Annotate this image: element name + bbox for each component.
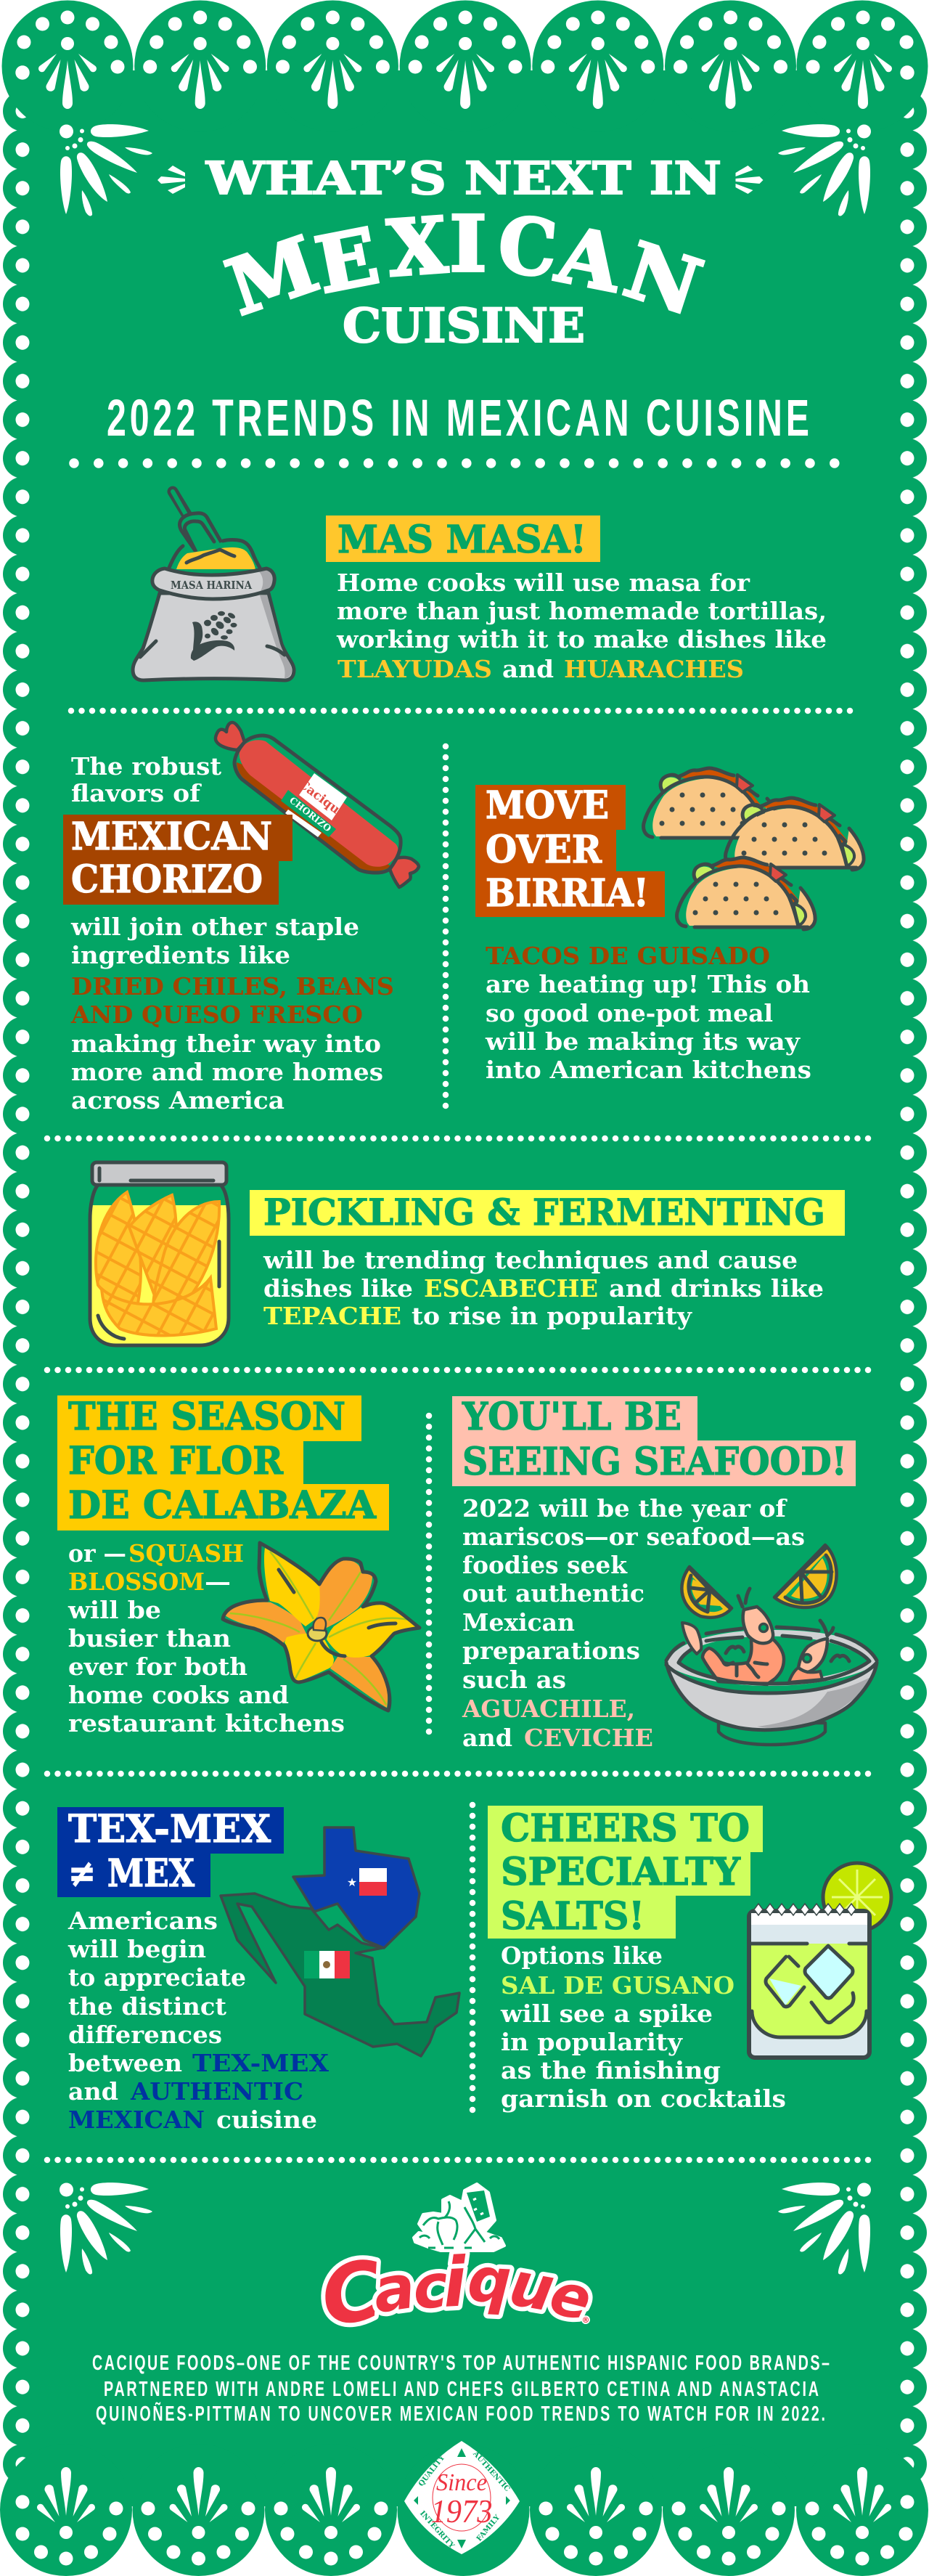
footer paragraph: QUINOÑES-PITTMAN TO UNCOVER MEXICAN FOOD TRENDS TO WATCH FOR IN 2022. (96, 2402, 825, 2426)
logo wordmark: c (409, 2251, 451, 2323)
divider 2 (47, 1136, 874, 1141)
chorizo label (281, 773, 349, 837)
badge: since 1973 (404, 2441, 520, 2554)
title arched word: N (615, 225, 711, 333)
chorizo label: CHORIZO (287, 794, 334, 834)
body text: BLOSSOM (68, 1568, 205, 1596)
badge: since 1973: FAMILY (475, 2514, 502, 2543)
map of texas: ★ (347, 1875, 357, 1889)
body text: more and more homes (71, 1058, 383, 1086)
body text: into American kitchens (486, 1056, 811, 1084)
panel: flor de calabaza (57, 1395, 420, 1737)
divider 1 (71, 708, 851, 714)
heading banner: FOR FLOR (68, 1439, 284, 1483)
body text: will begin (67, 1935, 206, 1963)
body text: and (502, 655, 554, 683)
body text (485, 942, 811, 1084)
body text: HUARACHES (564, 655, 744, 683)
citrus wedge left (682, 1567, 732, 1618)
heading banner: TEX-MEX (68, 1807, 271, 1851)
body text: out authentic (462, 1579, 644, 1607)
body text: — (205, 1568, 231, 1596)
body text: will join other staple (70, 913, 359, 941)
heading banner (57, 1395, 389, 1530)
body text (70, 913, 394, 1114)
body text: ingredients like (71, 941, 290, 969)
sack body (133, 593, 294, 680)
heading banner (452, 1395, 856, 1486)
body text: foodies seek (462, 1551, 628, 1579)
title arched word (216, 200, 711, 333)
corner flower top right (778, 124, 871, 216)
heading banner (63, 815, 292, 905)
body text: and (462, 1724, 512, 1752)
heading banner: SALTS! (501, 1894, 644, 1939)
icon: chorizo sausage (216, 722, 419, 887)
icon: squash blossom (223, 1543, 420, 1711)
body text: Americans (67, 1907, 218, 1935)
shrimp (682, 1589, 849, 1684)
body text: between (68, 2049, 182, 2077)
logo wordmark: ® (582, 2315, 589, 2325)
intro text: flavors of (71, 779, 202, 807)
body text: and (68, 2077, 118, 2106)
body text: making their way into (71, 1030, 381, 1058)
vertical divider (470, 1805, 475, 2120)
divider 5 (47, 2157, 874, 2163)
title arched word: X (385, 200, 450, 294)
body text: will be trending techniques and cause (263, 1246, 798, 1274)
body text: AGUACHILE, (462, 1695, 635, 1723)
icon: maps of mexico and texas (221, 1827, 459, 2056)
badge: since 1973: AUTHENTIC (471, 2450, 511, 2493)
vertical divider (443, 746, 449, 1109)
heading banner: SEEING SEAFOOD! (462, 1440, 847, 1484)
body text: SAL DE GUSANO (501, 1971, 734, 2000)
heading banner: SPECIALTY (501, 1850, 741, 1894)
body text: are heating up! This oh (486, 970, 810, 998)
heading banner: MOVE (486, 783, 609, 828)
body text: in popularity (501, 2028, 683, 2056)
body text: as the finishing (501, 2056, 721, 2084)
body text: home cooks and (68, 1681, 289, 1709)
icon: pickle jar (90, 1162, 229, 1345)
body text: mariscos—or seafood—as (462, 1523, 805, 1551)
intro text: The robust (71, 752, 222, 780)
body text: and drinks like (609, 1274, 824, 1303)
bottom border cut-outs (16, 2467, 914, 2566)
intro text (71, 752, 222, 807)
icon: tacos (644, 768, 864, 929)
body text: ever for both (68, 1652, 247, 1681)
heading banner: THE SEASON (68, 1395, 345, 1439)
heading banner: ≠ MEX (68, 1851, 195, 1896)
body text: or — (68, 1539, 126, 1568)
body text: working with it to make dishes like (336, 625, 827, 653)
heading banner: BIRRIA! (486, 871, 649, 916)
sack neck (152, 568, 274, 599)
bowl back rim (666, 1630, 877, 1686)
badge: since 1973: 1973 (431, 2493, 492, 2530)
body text: preparations (462, 1637, 640, 1665)
logo wordmark: q (466, 2244, 513, 2318)
logo wordmark (316, 2243, 598, 2344)
badge: since 1973: Since (436, 2469, 487, 2496)
logo wordmark: i (441, 2243, 470, 2323)
body text: to rise in popularity (412, 1302, 692, 1330)
top border cut-outs (15, 10, 914, 109)
masa mound (169, 540, 260, 569)
icon: cocktail glass with lime (749, 1863, 891, 2058)
panel: move over birria (475, 768, 864, 1084)
body text: MEXICAN (68, 2106, 205, 2134)
body text: TLAYUDAS (337, 655, 492, 683)
badge: since 1973: QUALITY (417, 2453, 447, 2488)
corner flower top left (60, 124, 152, 216)
body text: Options like (501, 1941, 663, 1970)
body text: SQUASH (128, 1539, 244, 1568)
icon: masa harina sack (133, 492, 294, 680)
corner flower bottom right (778, 2182, 871, 2274)
icon: shrimp bowl with citrus (666, 1545, 877, 1745)
body text: 2022 will be the year of (462, 1494, 787, 1523)
body text: Home cooks will use masa for (337, 568, 750, 597)
body text (336, 568, 827, 683)
body text: such as (462, 1666, 566, 1694)
logo wordmark: e (544, 2259, 598, 2334)
body text: will be making its way (485, 1027, 801, 1056)
body text: DRIED CHILES, BEANS (71, 972, 394, 1000)
bowl foot (719, 1723, 825, 1745)
body text: cuisine (216, 2106, 317, 2134)
body text: CEVICHE (524, 1724, 653, 1752)
vertical divider (426, 1416, 432, 1733)
heading banner: CHORIZO (71, 857, 263, 902)
body text (500, 1941, 786, 2113)
body text (462, 1494, 805, 1752)
chorizo label: Cacique (295, 777, 349, 822)
heading banner: PICKLING & FERMENTING (263, 1191, 825, 1234)
heading banner: CHEERS TO (501, 1806, 750, 1851)
body text: TACOS DE GUISADO (486, 942, 770, 970)
logo wordmark: C (316, 2243, 388, 2344)
body text: differences (68, 2021, 222, 2049)
logo: cacique (316, 2184, 598, 2344)
panel: mas masa (133, 492, 827, 683)
body text: TEPACHE (263, 1302, 401, 1330)
divider 4 (47, 1771, 874, 1777)
map of texas (293, 1827, 420, 1948)
footer paragraph: CACIQUE FOODS–ONE OF THE COUNTRY'S TOP AUTHENTIC HISPANIC FOOD BRANDS– (92, 2352, 830, 2375)
body text: the distinct (68, 1992, 227, 2021)
panel: specialty salts (488, 1806, 891, 2113)
heading banner: DE CALABAZA (68, 1483, 377, 1528)
title line 3: CUISINE (343, 298, 585, 354)
body text: will be (67, 1596, 161, 1624)
heading banner (57, 1807, 284, 1897)
heading banner: OVER (486, 828, 602, 872)
heading banner (475, 783, 665, 917)
dotted rule under subtitle (74, 458, 835, 468)
body text: Mexican (462, 1608, 575, 1637)
body text: garnish on cocktails (501, 2084, 786, 2113)
title arched word: E (308, 211, 385, 311)
body text: will see a spike (500, 2000, 713, 2028)
heading banner: MAS MASA! (337, 518, 586, 562)
title block (157, 152, 764, 354)
corn icon (191, 611, 237, 661)
heading banner: MEXICAN (71, 815, 272, 859)
body text (263, 1246, 824, 1330)
citrus wedge right (774, 1545, 837, 1607)
heading banner: YOU'LL BE (462, 1395, 682, 1439)
body text: dishes like (263, 1274, 413, 1303)
body text (67, 1907, 329, 2134)
icon: masa harina sack: MASA HARINA (171, 579, 252, 592)
panel: tex-mex (57, 1807, 459, 2134)
map of mexico (221, 1894, 459, 2056)
flourish left (157, 166, 185, 194)
badge: since 1973: INTEGRITY (418, 2509, 456, 2551)
body text: to appreciate (68, 1963, 246, 1992)
title arched word: M (216, 219, 329, 333)
title arched word: C (495, 200, 560, 295)
body text: across America (71, 1086, 285, 1114)
body text: AND QUESO FRESCO (70, 1000, 363, 1029)
body text: so good one-pot meal (486, 999, 773, 1027)
body text: restaurant kitchens (68, 1709, 345, 1737)
footer paragraph: PARTNERED WITH ANDRE LOMELI AND CHEFS GILBERTO CETINA AND ANASTACIA (104, 2378, 819, 2401)
logo wordmark: u (504, 2248, 560, 2326)
body text: TEX-MEX (192, 2049, 329, 2077)
logo wordmark: a (369, 2251, 420, 2327)
corner flower bottom left (60, 2182, 152, 2274)
subtitle: 2022 TRENDS IN MEXICAN CUISINE (107, 389, 809, 447)
body text (67, 1539, 345, 1737)
body text: ESCABECHE (424, 1274, 598, 1303)
heading banner (488, 1806, 763, 1939)
title arched word: A (549, 210, 630, 310)
body text: AUTHENTIC (130, 2077, 303, 2106)
panel: seafood (452, 1395, 877, 1752)
panel: pickling and fermenting (90, 1162, 845, 1345)
title arched word: I (449, 200, 487, 290)
title line 1: WHAT’S NEXT IN (205, 152, 721, 205)
footer paragraph (92, 2352, 830, 2426)
panel: mexican chorizo (63, 722, 419, 1114)
body text: more than just homemade tortillas, (337, 597, 827, 625)
body text: busier than (68, 1624, 231, 1652)
divider 3 (47, 1367, 874, 1373)
logo figure (414, 2184, 504, 2251)
scoop (173, 492, 221, 552)
flourish right (736, 166, 764, 194)
bowl body (666, 1663, 877, 1730)
